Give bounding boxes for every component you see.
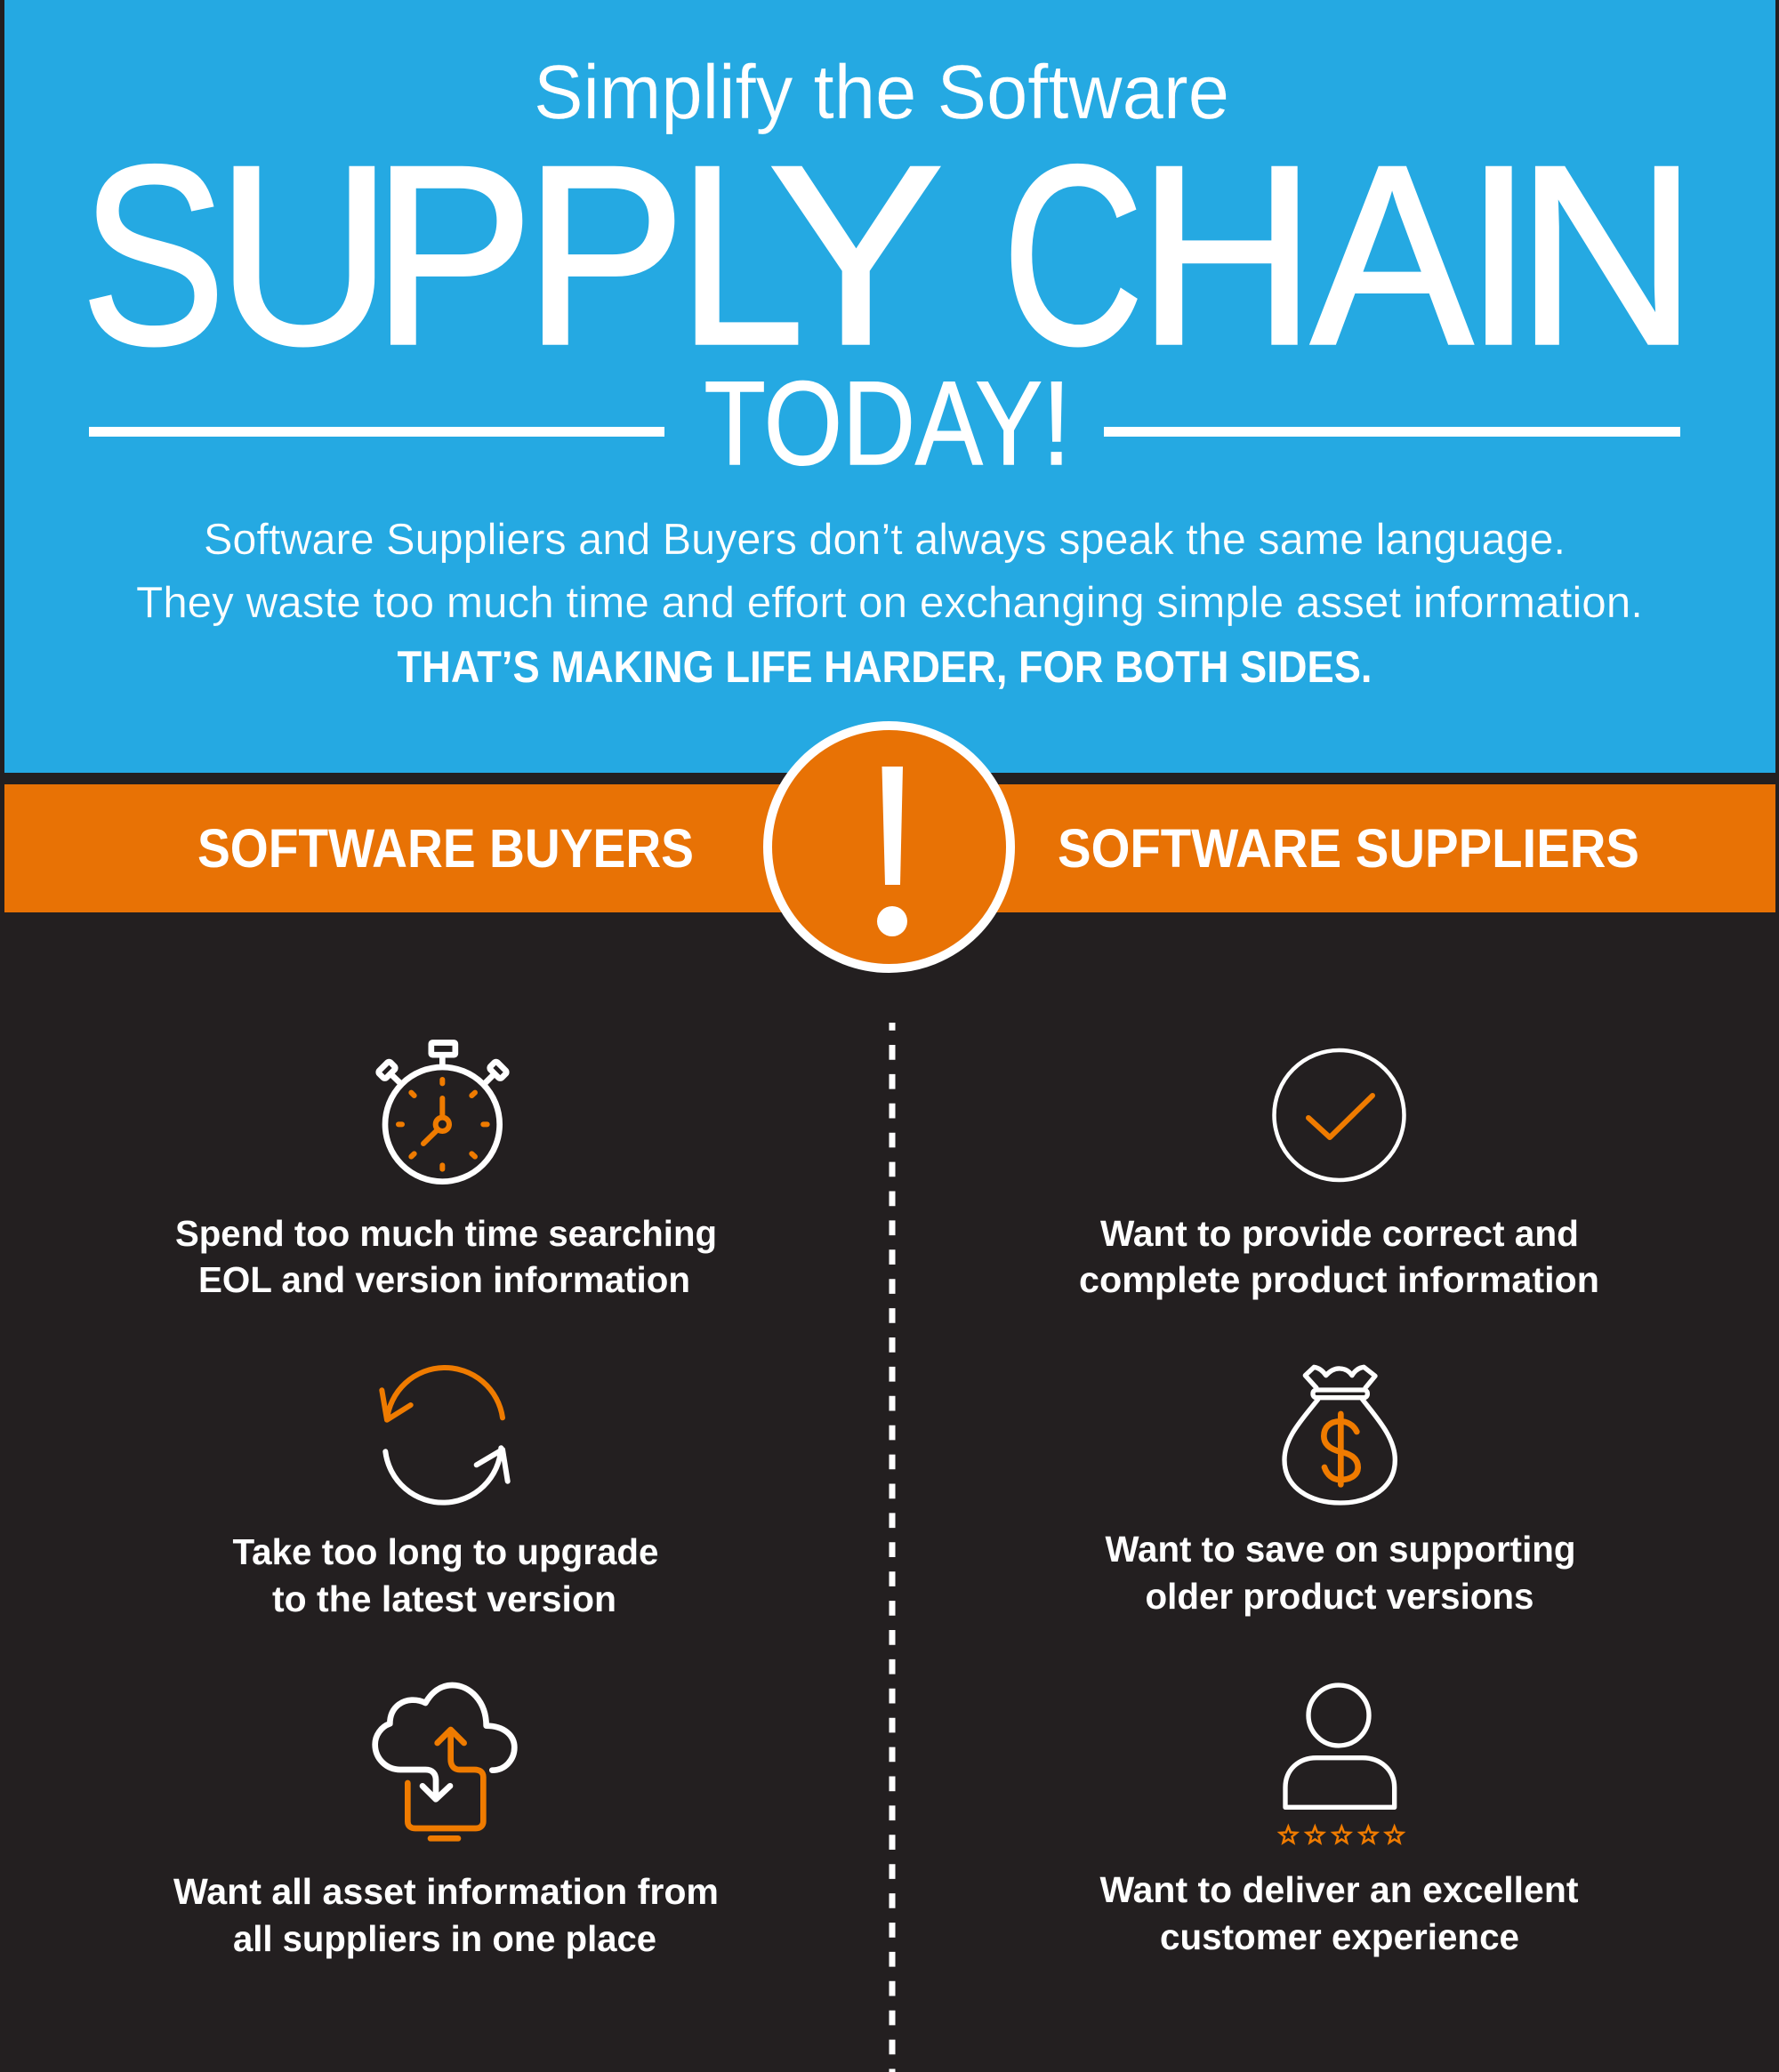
panel: header (4, 0, 1775, 773)
text: buyers point 2: to the latest version (272, 1578, 616, 1619)
text: suppliers point 2: Want to save on supporting (1105, 1529, 1576, 1570)
text: suppliers point 3: Want to deliver an excellent (1099, 1869, 1579, 1910)
main title: C (1002, 112, 1143, 398)
heading: software buyers: SOFTWARE BUYERS (197, 818, 694, 879)
main title: P (372, 112, 534, 398)
intro line 2: They waste too much time and effort on exchanging simple asset information. (136, 579, 1643, 627)
icon: refresh arrows (382, 1368, 508, 1503)
text: buyers point 3 (173, 1871, 719, 1959)
text: buyers point 1: EOL and version information (198, 1259, 690, 1300)
left rule (89, 427, 664, 437)
main title: U (216, 112, 392, 398)
header background (4, 0, 1775, 773)
text: suppliers point 3: customer experience (1160, 1916, 1519, 1957)
text: buyers point 2 (233, 1531, 658, 1619)
main title: H (1138, 112, 1316, 398)
panel: buyers (173, 1042, 719, 1959)
icon: check circle (1274, 1050, 1404, 1180)
today heading: TODAY! (704, 357, 1071, 490)
icon: exclamation badge (768, 726, 1010, 968)
text: suppliers point 2 (1105, 1529, 1576, 1617)
icon: customer with star rating (1280, 1685, 1403, 1843)
heading: software suppliers: SOFTWARE SUPPLIERS (1058, 818, 1639, 879)
main title: A (1311, 112, 1474, 398)
main title: P (524, 112, 686, 398)
icon: money bag (1284, 1367, 1395, 1503)
main title: N (1516, 112, 1697, 398)
text: buyers point 1 (175, 1213, 717, 1300)
right rule (1104, 427, 1680, 437)
main title: Y (769, 112, 941, 398)
text: suppliers point 3 (1099, 1869, 1579, 1957)
main title: S (81, 112, 226, 398)
text: suppliers point 1 (1079, 1213, 1599, 1300)
intro line 3: THAT’S MAKING LIFE HARDER, FOR BOTH SIDES. (397, 642, 1372, 692)
panel: suppliers (1079, 1050, 1599, 1957)
dashed divider (890, 1023, 895, 2072)
text: suppliers point 1: complete product information (1079, 1259, 1599, 1300)
text: suppliers point 2: older product versions (1146, 1576, 1533, 1617)
icon: cloud and monitor (375, 1685, 514, 1838)
subtitle: Simplify the Software (534, 50, 1229, 135)
text: buyers point 3: Want all asset information from (173, 1871, 719, 1912)
icon: stopwatch (378, 1042, 507, 1182)
text: suppliers point 1: Want to provide correct and (1100, 1213, 1579, 1254)
text: buyers point 2: Take too long to upgrade (233, 1531, 658, 1572)
text: buyers point 3: all suppliers in one place (233, 1918, 656, 1959)
band (4, 784, 1775, 912)
main title: L (678, 112, 804, 398)
main title: I (1464, 112, 1533, 398)
panel: orange column header band (4, 784, 1775, 912)
text: buyers point 1: Spend too much time searching (175, 1213, 717, 1254)
intro line 1: Software Suppliers and Buyers don’t always speak the same language. (204, 516, 1566, 564)
